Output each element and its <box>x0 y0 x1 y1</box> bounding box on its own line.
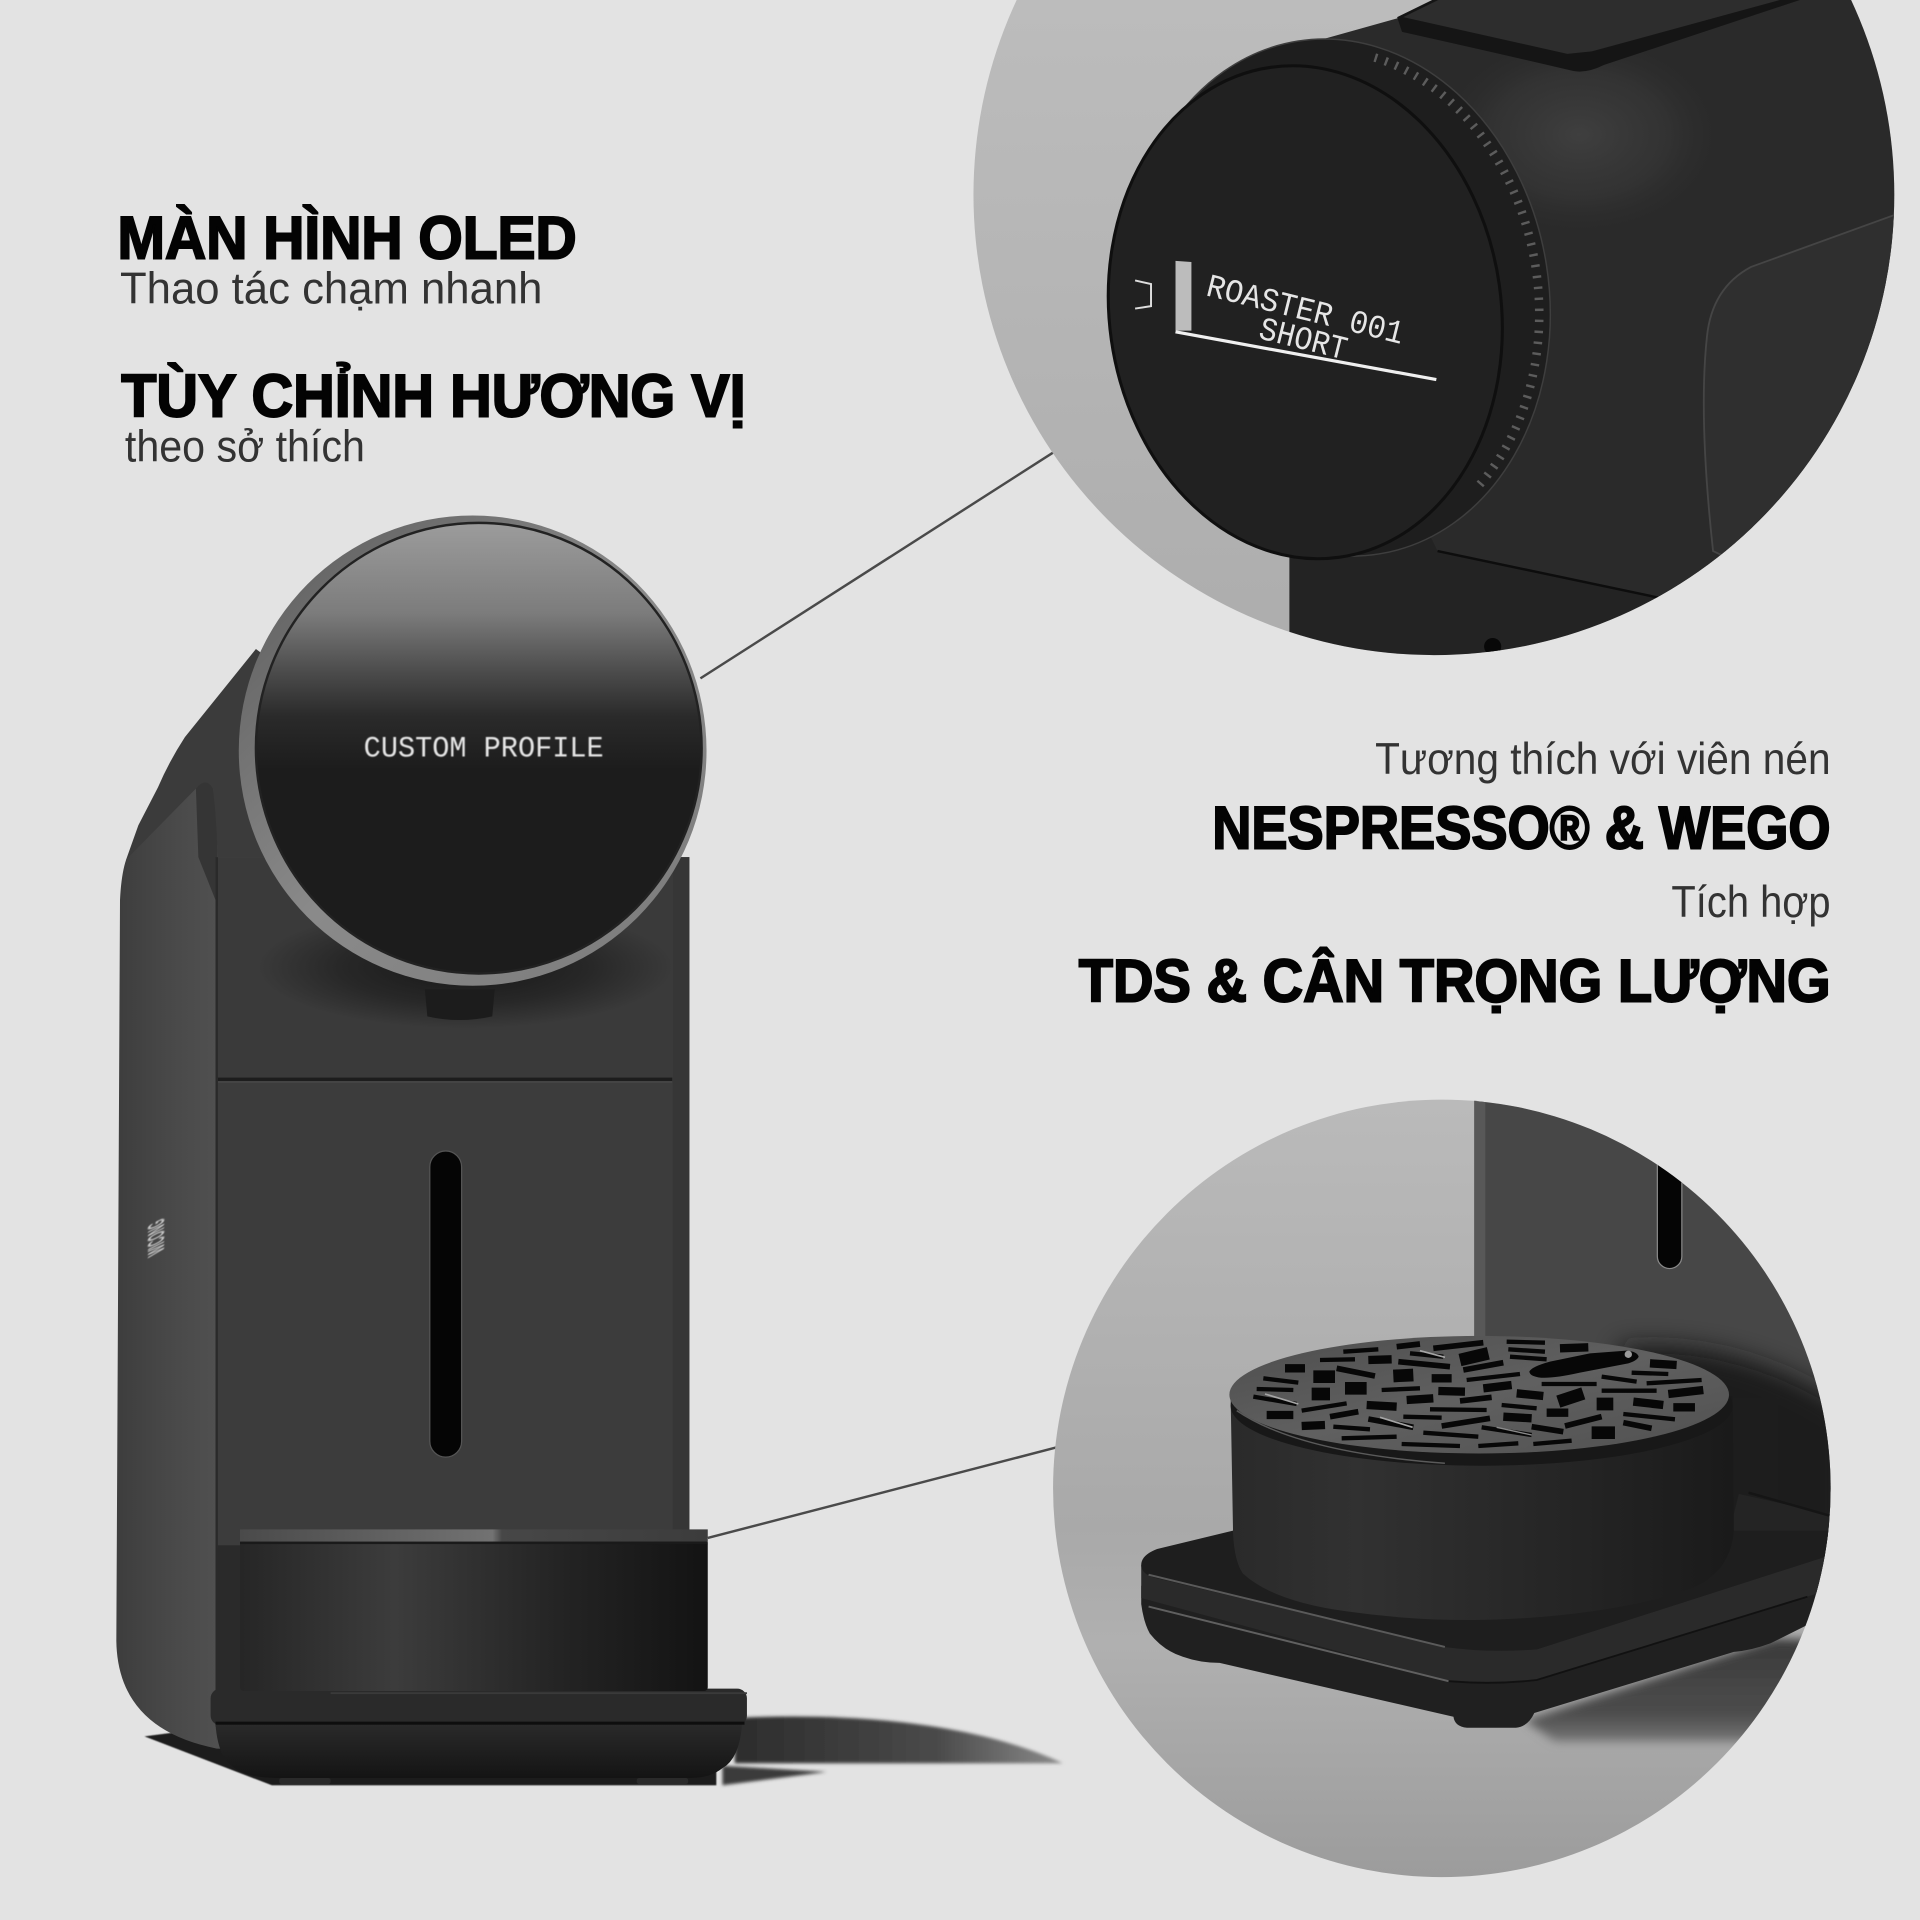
feet <box>279 1778 331 1784</box>
lower front block <box>1289 527 1779 661</box>
heading: TDS and scale: TDS & CÂN TRỌNG LƯỢNG <box>1079 948 1831 1015</box>
OLED text: roaster: ROASTER 001 <box>1202 268 1408 354</box>
callout line to scale detail <box>708 1447 1057 1538</box>
cup body <box>240 1540 708 1691</box>
knurled ring <box>1186 38 1551 557</box>
cup rim <box>1230 1402 1646 1466</box>
display ring <box>239 516 707 986</box>
OLED text: short: SHORT <box>1255 311 1351 369</box>
screen disk <box>1106 64 1504 560</box>
tray top surface <box>1141 1531 1831 1651</box>
tray lower <box>216 1724 742 1778</box>
nozzle <box>425 989 495 1020</box>
cup rim <box>240 1529 708 1542</box>
coffee machine: WICONG <box>144 1214 170 1260</box>
display text: CUSTOM PROFILE <box>364 733 604 766</box>
heading: customize flavor: TÙY CHỈNH HƯƠNG VỊ <box>121 362 746 429</box>
lower water tank panel <box>218 1082 672 1548</box>
detail circle: scale close-up <box>1047 1078 1849 1883</box>
subheading: quick touch: Thao tác chạm nhanh <box>120 265 542 314</box>
subheading: compatible capsules: Tương thích với viên nén <box>1375 735 1831 784</box>
cup grid plate <box>1229 1336 1729 1453</box>
machine wall <box>1474 1090 1842 1543</box>
detail circle: display close-up <box>967 0 1920 686</box>
return icon <box>1135 280 1151 309</box>
tray highlights <box>1149 1575 1807 1683</box>
coffee machine <box>116 516 747 1784</box>
lower seam <box>1438 551 1658 598</box>
level bar <box>1176 261 1191 331</box>
cup body <box>1231 1396 1734 1620</box>
underline <box>1176 332 1436 380</box>
under-display shadow <box>257 906 673 1029</box>
top flap <box>1397 0 1837 72</box>
side panel rib <box>196 782 218 906</box>
gap beside cup <box>218 1545 242 1692</box>
plate holes <box>1253 1342 1703 1446</box>
display screen <box>256 523 702 973</box>
subheading: integrated: Tích hợp <box>1671 878 1831 927</box>
right edge <box>672 857 689 1543</box>
base platform <box>1752 1514 1830 1592</box>
machine body <box>116 784 689 1751</box>
floor shadow <box>1524 1638 1849 1741</box>
upper panel <box>218 857 672 1078</box>
subheading: to taste: theo sở thích <box>125 423 365 472</box>
tray side band <box>1141 1555 1831 1683</box>
tray upper <box>211 1689 747 1725</box>
slit <box>1656 1164 1682 1270</box>
machine body close-up <box>1326 0 1894 598</box>
right panel <box>1703 214 1894 556</box>
machine rear cylinder <box>126 649 404 906</box>
tray lower <box>1141 1580 1831 1728</box>
callout line to display detail <box>700 452 1054 678</box>
wall shadow <box>1616 1345 1849 1567</box>
heading: OLED screen: MÀN HÌNH OLED <box>118 204 577 271</box>
floor shadow <box>144 1716 1063 1785</box>
heading: Nespresso and Wego: NESPRESSO® & WEGO <box>1212 795 1831 862</box>
water level slit <box>430 1151 462 1457</box>
